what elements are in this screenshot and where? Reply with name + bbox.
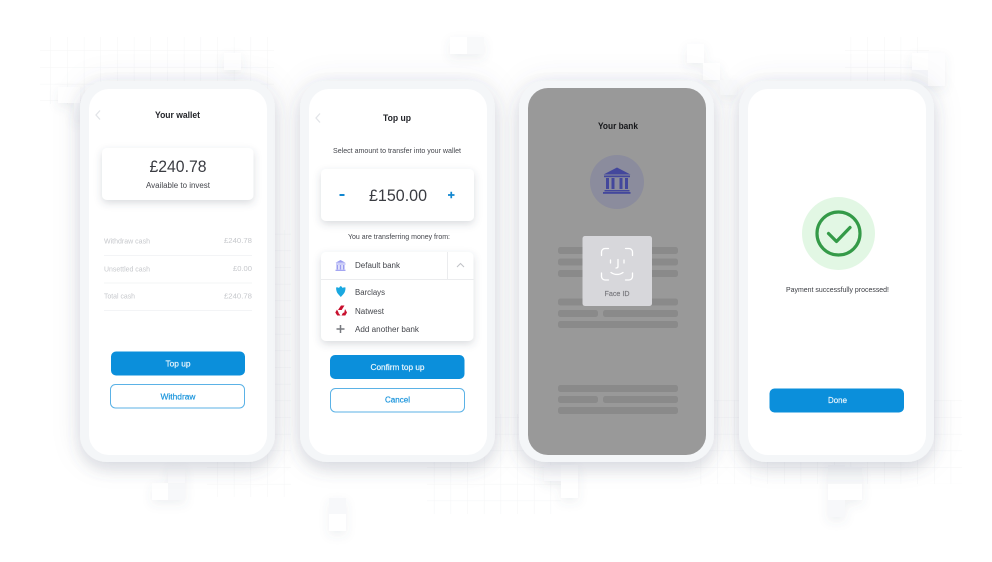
phone 4: payment success	[739, 81, 934, 462]
amount card	[321, 169, 474, 221]
icon: bank in circle	[590, 155, 644, 209]
heading: top up: Top up	[383, 113, 411, 123]
heading: your wallet: Your wallet	[155, 110, 200, 120]
back chevron	[316, 114, 320, 122]
button: withdraw	[110, 384, 244, 408]
button: done: Done	[828, 396, 848, 405]
icon: default bank	[336, 260, 346, 271]
balance card	[102, 148, 254, 200]
button: withdraw: Withdraw	[160, 392, 196, 402]
phone 2: top up	[300, 81, 495, 462]
source label: You are transferring money from:	[348, 232, 450, 241]
placeholder text lines	[558, 247, 678, 414]
bank dropdown	[321, 252, 474, 341]
phone 3: your bank with face id	[519, 81, 714, 462]
button: confirm top up: Confirm top up	[370, 363, 425, 372]
cash breakdown rows	[104, 236, 252, 311]
success message: Payment successfully processed!	[786, 285, 889, 294]
bank dropdown: Add another bank	[355, 325, 420, 334]
phone 1: your wallet	[80, 81, 275, 462]
button: top up: Top up	[166, 360, 191, 368]
icon: barclays	[336, 286, 346, 297]
background grid panels	[40, 37, 962, 514]
cash breakdown rows: Unsettled cash	[104, 264, 150, 274]
face id dialog: Face ID	[604, 289, 630, 298]
icon: success check	[802, 197, 875, 270]
heading: your bank: Your bank	[598, 121, 639, 131]
balance card: Available to invest	[146, 181, 211, 190]
button: done	[770, 388, 904, 412]
button: cancel	[330, 388, 464, 412]
amount card: £150.00	[369, 186, 427, 205]
back chevron	[96, 110, 100, 120]
face id dialog	[582, 236, 652, 306]
background floating tiles	[58, 37, 945, 531]
icon: face id	[602, 248, 632, 280]
button: confirm top up	[330, 355, 464, 379]
cash breakdown rows: Total cash	[104, 292, 135, 300]
cash breakdown rows: Withdraw cash	[104, 236, 150, 246]
icon: natwest	[335, 306, 347, 316]
bank dropdown: Default bank	[355, 261, 401, 270]
bank dropdown: Barclays	[355, 288, 385, 297]
cash breakdown rows: £0.00	[233, 264, 252, 273]
cash breakdown rows: £240.78	[224, 292, 252, 300]
button: top up	[111, 352, 245, 376]
cash breakdown rows: £240.78	[224, 236, 252, 245]
button: cancel: Cancel	[385, 396, 410, 404]
icon: add bank	[336, 325, 344, 333]
instruction text: Select amount to transfer into your wallet	[333, 146, 461, 155]
bank dropdown: Natwest	[355, 307, 385, 316]
balance card: £240.78	[150, 157, 206, 176]
